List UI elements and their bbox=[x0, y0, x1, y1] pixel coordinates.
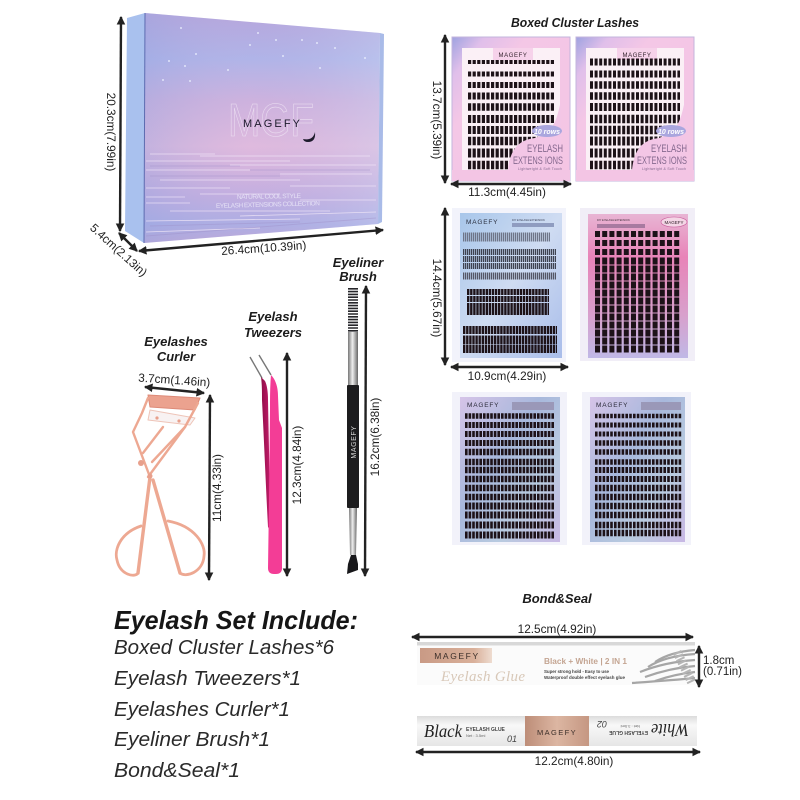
lash tray 4: pink: MAGEFY bbox=[664, 220, 684, 225]
pink corner wave bbox=[508, 100, 561, 172]
tube length dimension: 12.2cm(4.80in) bbox=[535, 754, 613, 768]
lash box 1: 10 rows bbox=[534, 129, 560, 136]
box front panel bbox=[144, 13, 380, 243]
glue height dimension bbox=[699, 646, 742, 687]
list heading: Eyelash Set Include: bbox=[114, 605, 358, 635]
pink corner wave bbox=[632, 100, 685, 172]
eyelash extensions label bbox=[513, 143, 563, 171]
lash rows bbox=[463, 237, 556, 276]
lash box 1 bbox=[452, 37, 570, 181]
glue tube: EYELASH GLUE bbox=[466, 727, 506, 733]
lash tray 5: iridescent left bbox=[452, 392, 567, 545]
list items: Eyelash Tweezers*1 bbox=[114, 668, 301, 690]
title: bond and seal: Bond&Seal bbox=[522, 591, 592, 606]
section title: boxed cluster lashes: Boxed Cluster Lashes bbox=[511, 15, 639, 30]
tray height dimension: 14.4cm(5.67in) bbox=[430, 259, 444, 337]
glue box bbox=[417, 642, 695, 685]
list items: Eyelashes Curler*1 bbox=[114, 699, 290, 721]
box tagline: EYELASH EXTENSIONS COLLECTION bbox=[216, 200, 320, 210]
brand label bbox=[420, 648, 492, 663]
box MGF outline logo: MGF bbox=[228, 94, 314, 146]
glue tube: 01 bbox=[507, 734, 517, 744]
list items: Bond&Seal*1 bbox=[114, 760, 240, 782]
lash grid bbox=[595, 234, 681, 349]
title: eyelashes curler: Curler bbox=[157, 349, 196, 364]
glue length dimension: 12.5cm(4.92in) bbox=[518, 622, 596, 636]
lash tray 6: iridescent right bbox=[582, 392, 691, 545]
box side panel bbox=[125, 13, 145, 243]
lash graphic bbox=[632, 650, 695, 683]
lash box 2: MAGEFY bbox=[623, 53, 651, 59]
box height dimension: 20.3cm(7.99in) bbox=[104, 93, 118, 171]
eyelash extensions label: Lightweight & Soft Touch bbox=[642, 167, 686, 171]
box stars bbox=[162, 27, 366, 82]
lash tray 6: iridescent right: MAGEFY bbox=[596, 402, 628, 409]
glue box: Waterproof double effect eyelash glue bbox=[544, 675, 625, 680]
eyelash extensions label: EYELASH bbox=[527, 143, 563, 155]
brush height dimension: 16.2cm(6.38in) bbox=[368, 398, 382, 476]
eyelash extensions label: EXTENS IONS bbox=[637, 155, 687, 167]
lash tray 4: pink bbox=[580, 208, 695, 361]
box lash width dimension bbox=[451, 184, 571, 199]
glue box: Super strong hold - Easy to use bbox=[544, 669, 609, 674]
list items: Eyeliner Brush*1 bbox=[114, 729, 270, 751]
eyelash extensions label: Lightweight & Soft Touch bbox=[518, 167, 562, 171]
lash rows bbox=[590, 62, 680, 165]
rows badge bbox=[656, 125, 686, 137]
lash tray 5: iridescent left: MAGEFY bbox=[467, 402, 499, 409]
tweezers height dimension: 12.3cm(4.84in) bbox=[290, 426, 304, 504]
box lash width dimension: 11.3cm(4.45in) bbox=[468, 185, 546, 199]
glue box: MAGEFY bbox=[434, 651, 480, 661]
glue tube: Net : 3.5ml bbox=[621, 724, 640, 729]
box tagline: NATURAL COOL STYLE bbox=[237, 193, 302, 201]
title: eyeliner brush: Eyeliner bbox=[333, 255, 384, 270]
box depth dimension: 5.4cm(2.13in) bbox=[87, 221, 150, 279]
lash box 1: MAGEFY bbox=[499, 53, 527, 59]
product tagline: Black + White | 2 IN 1 bbox=[544, 657, 628, 666]
white label: White bbox=[651, 720, 689, 740]
product name: Eyelash Glue bbox=[440, 669, 525, 685]
lash rows bbox=[595, 416, 682, 533]
lash tray 3: blue: DIY EYELASH EXTENSION bbox=[512, 218, 545, 222]
list items: Boxed Cluster Lashes*6 bbox=[114, 637, 335, 659]
title: eyelashes curler: Eyelashes bbox=[144, 334, 208, 349]
title: eyeliner brush: Brush bbox=[339, 269, 377, 284]
box brand name: MAGEFY bbox=[243, 118, 301, 130]
rows badge bbox=[532, 125, 562, 137]
icon: eyeliner brush: MAGEFY bbox=[351, 425, 358, 459]
glue tube: 02 bbox=[597, 719, 607, 729]
product box bbox=[125, 13, 384, 243]
box length dimension: 26.4cm(10.39in) bbox=[221, 238, 307, 258]
curler height dimension: 11cm(4.33in) bbox=[210, 454, 224, 522]
eyelash extensions label: EYELASH bbox=[651, 143, 687, 155]
box length dimension bbox=[139, 230, 383, 258]
title: eyelash tweezers: Eyelash bbox=[248, 309, 298, 324]
lash tray 4: pink: DIY EYELASH EXTENSION bbox=[597, 218, 630, 222]
box sea reflections bbox=[146, 154, 376, 232]
eyelash extensions label bbox=[637, 143, 687, 171]
curler width dimension: 3.7cm(1.46in) bbox=[138, 371, 211, 390]
title: eyelash tweezers: Tweezers bbox=[244, 325, 302, 340]
lash tray 3: blue bbox=[452, 208, 566, 362]
glue tube: EYELASH GLUE bbox=[608, 729, 648, 735]
lash tray 3: blue: MAGEFY bbox=[466, 219, 498, 226]
icon: tweezers bbox=[250, 355, 282, 574]
glue height dimension: 1.8cm bbox=[703, 655, 734, 667]
list items bbox=[114, 637, 335, 782]
icon: eyelash curler bbox=[116, 395, 204, 575]
box lash height dimension: 13.7cm(5.39in) bbox=[430, 81, 444, 159]
tray width dimension bbox=[451, 367, 568, 383]
black label: Black bbox=[424, 721, 463, 741]
eyelash extensions label: EXTENS IONS bbox=[513, 155, 563, 167]
icon: eyeliner brush bbox=[347, 288, 359, 574]
glue height dimension: (0.71in) bbox=[703, 666, 742, 678]
lash box 2 bbox=[576, 37, 694, 181]
glue tube: Net : 3.5ml bbox=[466, 733, 485, 738]
set contents list bbox=[114, 605, 358, 782]
lash rows bbox=[468, 62, 554, 165]
lash box 2: 10 rows bbox=[658, 129, 684, 136]
lash rows bbox=[465, 416, 555, 535]
glue tube: MAGEFY bbox=[537, 728, 577, 737]
gold band bbox=[525, 716, 589, 746]
glue tube bbox=[417, 716, 697, 746]
box tagline bbox=[216, 193, 320, 210]
box moon bbox=[303, 132, 315, 142]
tray width dimension: 10.9cm(4.29in) bbox=[468, 369, 546, 383]
